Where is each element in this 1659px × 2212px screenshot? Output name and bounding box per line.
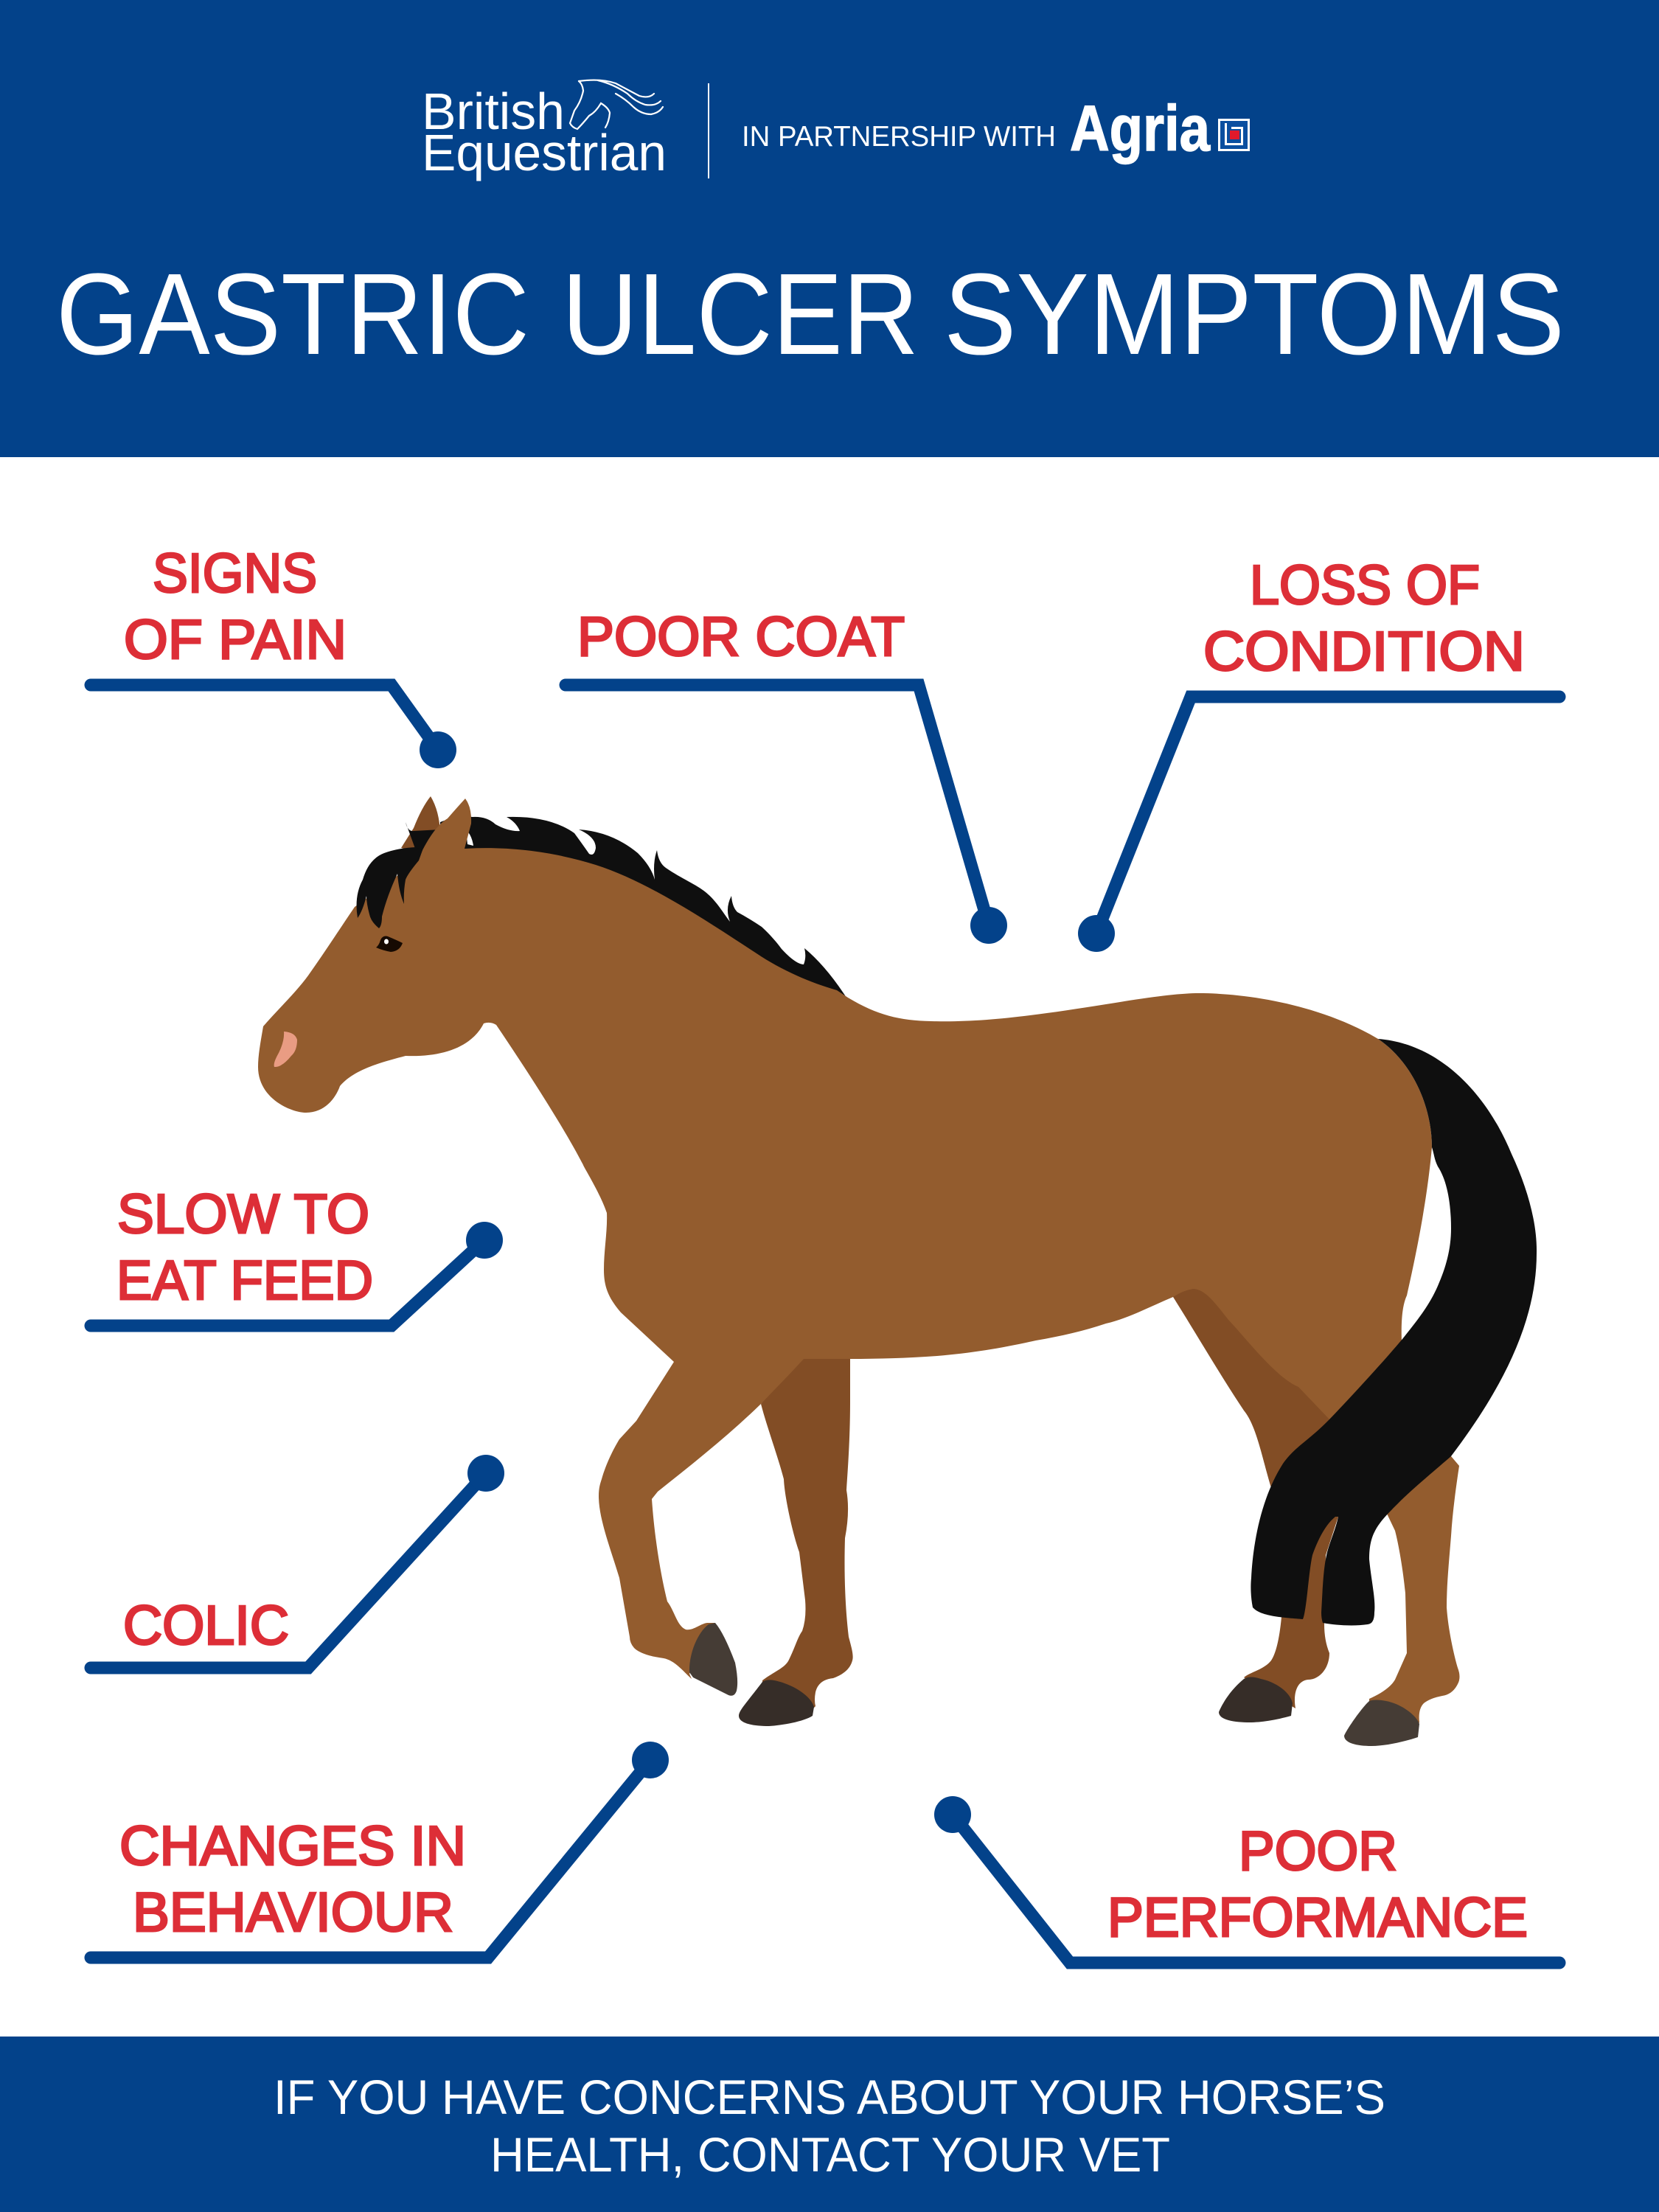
callout: poor performance: POOR xyxy=(1239,1820,1397,1882)
callout: poor performance xyxy=(934,1796,1559,1963)
header banner xyxy=(0,0,1659,457)
far front hoof xyxy=(739,1680,814,1726)
footer message: IF YOU HAVE CONCERNS ABOUT YOUR HORSE’S xyxy=(274,2070,1385,2124)
logo: Agria: Agria xyxy=(1070,93,1211,164)
callout: signs of pain: OF PAIN xyxy=(124,608,347,670)
far front leg xyxy=(761,1353,853,1711)
callout: colic xyxy=(91,1455,504,1668)
callout: slow to eat feed: EAT FEED xyxy=(116,1249,373,1311)
far ear xyxy=(401,796,440,855)
callout: loss of condition: CONDITION xyxy=(1203,620,1525,682)
logo: British Equestrian: British xyxy=(422,83,565,140)
footer message xyxy=(274,2070,1385,2182)
callout: poor coat: POOR COAT xyxy=(577,605,905,667)
callout: slow to eat feed xyxy=(91,1183,503,1326)
icon: Agria square mark xyxy=(1218,119,1250,151)
callout: loss of condition xyxy=(1078,554,1559,952)
footer message: HEALTH, CONTACT YOUR VET xyxy=(490,2127,1170,2182)
white sliver in mane xyxy=(466,830,473,846)
near front hoof xyxy=(689,1623,737,1696)
forelock xyxy=(357,847,422,928)
callout: slow to eat feed: SLOW TO xyxy=(117,1183,369,1245)
partnership text: IN PARTNERSHIP WITH xyxy=(742,121,1056,153)
callout: poor performance: PERFORMANCE xyxy=(1107,1886,1528,1948)
title xyxy=(56,250,1565,379)
eye xyxy=(376,936,403,952)
title: GASTRIC xyxy=(56,250,529,379)
logo: British Equestrian xyxy=(422,80,667,181)
nostril xyxy=(274,1032,297,1067)
callout: colic: COLIC xyxy=(123,1594,289,1656)
logo: British Equestrian: Equestrian xyxy=(422,124,667,181)
callout: changes in behaviour: BEHAVIOUR xyxy=(133,1881,453,1943)
near hind leg, body, neck, head and near front leg xyxy=(258,799,1460,1729)
mane along the neck xyxy=(406,817,846,998)
callout: signs of pain: SIGNS xyxy=(153,542,317,604)
icon: horse head outline xyxy=(570,80,663,129)
callout: poor coat xyxy=(566,605,1007,944)
callout: loss of condition: LOSS OF xyxy=(1250,554,1480,616)
far hind leg xyxy=(1150,1253,1338,1708)
divider between logos xyxy=(708,83,709,178)
illustration: horse xyxy=(258,796,1537,1746)
callout: signs of pain xyxy=(91,542,456,768)
tail xyxy=(1251,1039,1537,1625)
callout: changes in behaviour xyxy=(91,1742,669,1958)
footer banner xyxy=(0,2037,1659,2212)
title: ULCER xyxy=(562,250,919,379)
title: SYMPTOMS xyxy=(944,250,1565,379)
far hind hoof xyxy=(1219,1677,1293,1722)
near hind hoof xyxy=(1344,1700,1419,1746)
callout: changes in behaviour: CHANGES IN xyxy=(119,1815,466,1877)
